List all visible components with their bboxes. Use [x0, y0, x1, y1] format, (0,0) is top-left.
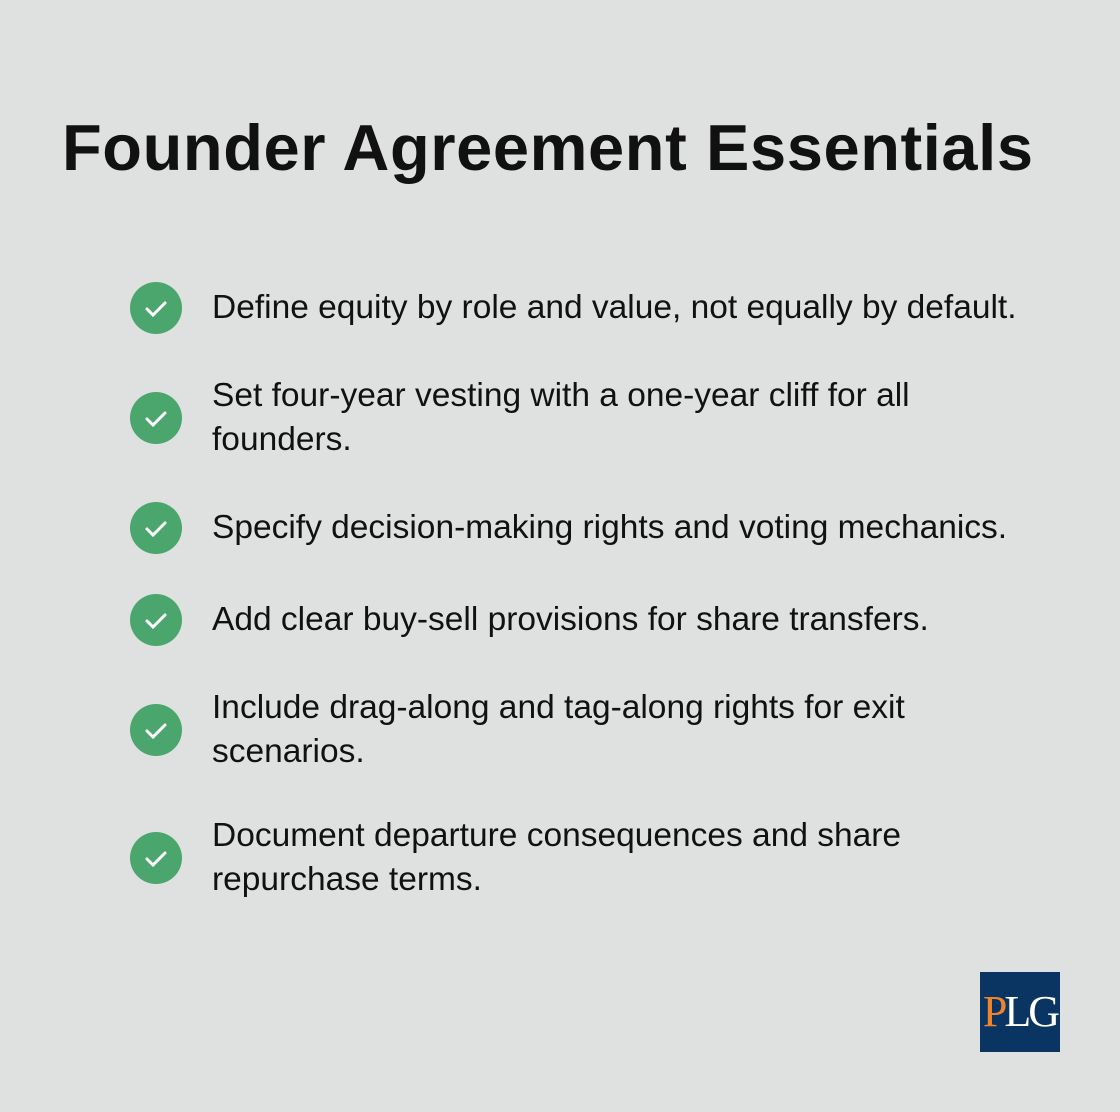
text: Define equity by role and value, not equally by default.: [212, 289, 1017, 326]
item 5: [130, 689, 905, 770]
text: [212, 817, 901, 898]
text: repurchase terms.: [212, 861, 482, 898]
icon: check: [130, 282, 182, 334]
text: Add clear buy-sell provisions for share transfers.: [212, 601, 929, 638]
text: scenarios.: [212, 733, 365, 770]
logo: PLG: [983, 987, 1057, 1036]
item 4: [130, 594, 929, 646]
title: Founder Agreement Essentials: [62, 111, 1034, 184]
item 3: [130, 502, 1007, 554]
item 2: [130, 377, 910, 458]
text: [212, 689, 905, 770]
icon: check: [130, 832, 182, 884]
text: founders.: [212, 421, 352, 458]
text: Set four-year vesting with a one-year cliff for all: [212, 377, 910, 414]
text: [212, 377, 910, 458]
icon: check: [130, 594, 182, 646]
icon: check: [130, 704, 182, 756]
text: Document departure consequences and share: [212, 817, 901, 854]
logo: [980, 972, 1060, 1052]
icon: check: [130, 392, 182, 444]
item 6: [130, 817, 901, 898]
text: Include drag-along and tag-along rights for exit: [212, 689, 905, 726]
icon: check: [130, 502, 182, 554]
text: Specify decision-making rights and voting mechanics.: [212, 509, 1007, 546]
item 1: [130, 282, 1017, 334]
